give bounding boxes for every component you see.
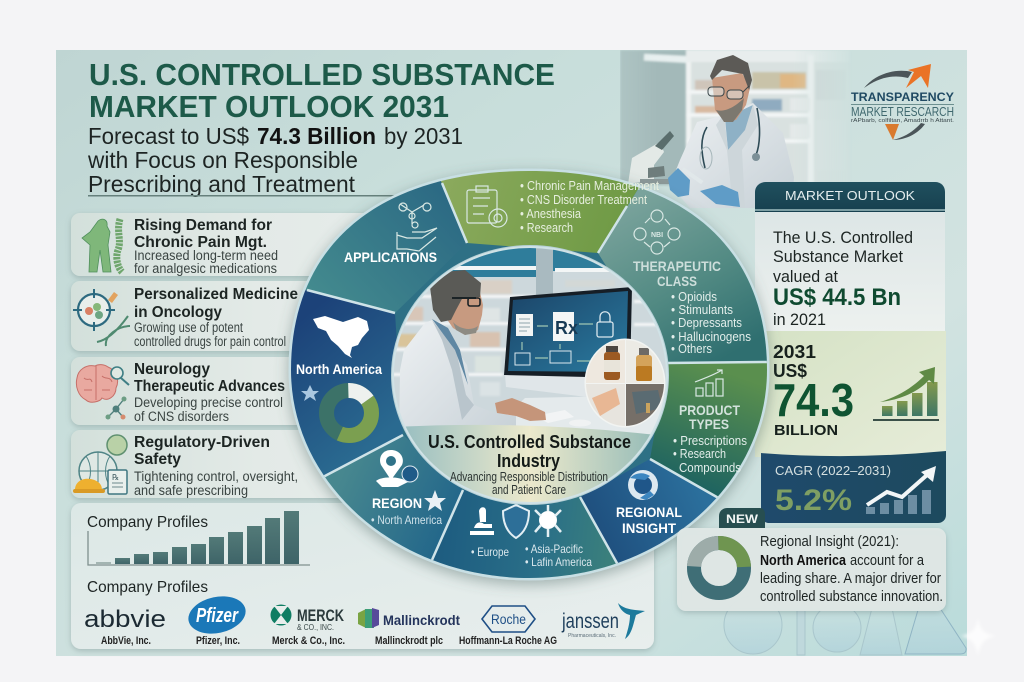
icon: bars with arrow bbox=[695, 370, 723, 396]
icon: hand with molecules bbox=[397, 203, 437, 251]
logo: Pfizer: Pfizer bbox=[196, 605, 239, 627]
card: oncology: controlled drugs for pain control bbox=[134, 334, 286, 349]
header: market outlook: MARKET OUTLOOK bbox=[785, 188, 915, 203]
card: regulatory: Safety bbox=[134, 451, 181, 468]
segment: regional insight: INSIGHT bbox=[622, 520, 676, 536]
icon: north america map bbox=[313, 316, 369, 358]
segment: north america bbox=[296, 316, 382, 436]
chart: donut bbox=[326, 390, 372, 436]
segment: region: REGION bbox=[372, 495, 422, 511]
icon: globe, helmet, prescription bbox=[73, 435, 127, 494]
center scene bbox=[391, 245, 669, 505]
body: market value: The U.S. Controlled bbox=[773, 228, 913, 247]
segment: product types: • Prescriptions bbox=[673, 433, 747, 448]
logo: Mallinckrodt: Mallinckrodt bbox=[383, 612, 460, 628]
forecast: 2031 value: 2031 bbox=[773, 342, 816, 362]
body: market value bbox=[755, 212, 945, 332]
title: MARKET OUTLOOK 2031 bbox=[89, 89, 449, 124]
doctor head bbox=[448, 293, 483, 335]
stat: CAGR: 5.2% bbox=[775, 484, 852, 517]
card: chronic pain: Increased long-term need bbox=[134, 248, 278, 263]
logo: Merck: MERCK bbox=[297, 606, 345, 625]
icon: target molecule and DNA bbox=[73, 289, 130, 346]
screen workflow icons: Rx bbox=[555, 318, 578, 338]
center label text: U.S. Controlled Substance bbox=[428, 432, 631, 452]
callout: regional insight: controlled substance innovation. bbox=[760, 589, 943, 605]
ring diagram bbox=[281, 166, 777, 592]
stat: CAGR bbox=[761, 451, 946, 523]
icon: globe, helmet, prescription: ℞ bbox=[112, 473, 119, 482]
segment: therapeutic class: THERAPEUTIC bbox=[633, 258, 721, 274]
logo: Roche: Hoffmann-La Roche AG bbox=[459, 635, 557, 647]
segment: applications list bbox=[467, 178, 659, 235]
card: neurology: of CNS disorders bbox=[134, 409, 229, 424]
header: market outlook bbox=[755, 182, 945, 212]
doctor coat bbox=[670, 103, 794, 208]
segment: product types bbox=[673, 370, 747, 475]
segment: product types: • Research bbox=[673, 446, 726, 461]
body: market value: valued at bbox=[773, 267, 838, 286]
segment: therapeutic class: • Others bbox=[671, 341, 712, 356]
callout: regional insight: account for a bbox=[850, 553, 925, 569]
card: oncology: Personalized Medicine bbox=[134, 286, 298, 303]
subtitle: Prescribing and Treatment bbox=[88, 171, 356, 197]
segment: product types: Compounds bbox=[679, 460, 741, 475]
logo: Transparency Market Research: TRANSPARENCY bbox=[851, 90, 954, 104]
segment: regions list: • Europe bbox=[471, 545, 509, 559]
icon: map pin bbox=[376, 450, 418, 487]
logo: Janssen: janssen bbox=[561, 610, 619, 633]
heading: company profiles chart: Company Profiles bbox=[87, 514, 208, 531]
card: regulatory bbox=[71, 430, 381, 498]
segment: region bbox=[371, 450, 446, 527]
segment: applications list: • CNS Disorder Treatment bbox=[520, 192, 647, 207]
logo: Merck: Merck & Co., Inc. bbox=[272, 635, 345, 647]
card: regulatory: and safe prescribing bbox=[134, 483, 248, 498]
card: neurology bbox=[71, 357, 381, 425]
bar chart bbox=[88, 511, 310, 565]
segment: therapeutic class: CLASS bbox=[657, 273, 697, 289]
card: oncology: in Oncology bbox=[134, 304, 222, 321]
card: oncology bbox=[71, 281, 381, 351]
sparkle bbox=[960, 618, 996, 656]
segment: therapeutic class: • Opioids bbox=[671, 289, 717, 304]
segment: applications: APPLICATIONS bbox=[344, 249, 437, 265]
segment: applications list: • Chronic Pain Management bbox=[520, 178, 659, 193]
subtitle: with Focus on Responsible bbox=[87, 147, 358, 173]
logo: Transparency Market Research bbox=[851, 64, 954, 140]
gloves bbox=[668, 167, 740, 207]
body: market value: Substance Market bbox=[773, 247, 903, 266]
body: market value: in 2021 bbox=[773, 310, 826, 329]
card: chronic pain: Rising Demand for bbox=[134, 217, 272, 234]
logo: AbbVie: AbbVie, Inc. bbox=[101, 635, 151, 647]
card: neurology: Neurology bbox=[134, 361, 210, 378]
card: neurology: Therapeutic Advances bbox=[134, 378, 285, 395]
logo: Pfizer bbox=[185, 591, 249, 647]
badge: new bbox=[719, 508, 765, 528]
segment: product types: TYPES bbox=[689, 416, 729, 432]
segment: region: • North America bbox=[371, 513, 442, 527]
logo: Merck: & CO., INC. bbox=[297, 623, 334, 632]
icon: microscope bbox=[470, 507, 494, 535]
background panel bbox=[56, 50, 967, 656]
segment: applications bbox=[344, 203, 437, 265]
logo: AbbVie bbox=[84, 606, 166, 647]
inset: product photos bbox=[583, 338, 668, 428]
center label text: Advancing Responsible Distribution bbox=[450, 469, 608, 484]
chart: CAGR arrow bbox=[866, 466, 936, 514]
callout: regional insight: North America bbox=[760, 553, 847, 569]
title: U.S. CONTROLLED SUBSTANCE bbox=[89, 57, 555, 92]
card: neurology: Developing precise control bbox=[134, 395, 283, 410]
chart: rising bars bbox=[873, 367, 939, 421]
stat: CAGR: CAGR (2022–2031) bbox=[775, 463, 891, 478]
microscope bbox=[628, 131, 674, 184]
forecast: 2031 value: 74.3 bbox=[773, 374, 854, 426]
chart: regional donut bbox=[694, 543, 744, 593]
forecast: 2031 value bbox=[755, 331, 946, 457]
icon: globe bbox=[628, 470, 658, 500]
card: regulatory: Tightening control, oversight, bbox=[134, 469, 298, 484]
icon: person with back pain and spine bbox=[82, 219, 122, 272]
callout: regional insight: leading share. A major driver for bbox=[760, 571, 941, 587]
segment: therapeutic class: • Depressants bbox=[671, 315, 742, 330]
icon: NBI cycle bbox=[634, 210, 680, 254]
subtitle bbox=[87, 123, 463, 197]
body: market value: US$ 44.5 Bn bbox=[773, 284, 901, 311]
forecast: 2031 value: US$ bbox=[773, 361, 807, 381]
title bbox=[89, 57, 555, 124]
center label text: and Patient Care bbox=[492, 482, 566, 497]
logo: AbbVie: abbvie bbox=[84, 606, 166, 633]
center label text: Industry bbox=[497, 451, 560, 471]
icon: brain and molecule bbox=[76, 365, 129, 420]
icon: shield bbox=[503, 505, 529, 538]
logo: Mallinckrodt bbox=[358, 608, 460, 647]
subtitle: 74.3 Billion bbox=[257, 123, 376, 149]
icon: clipboard with gear bbox=[467, 186, 507, 227]
center label text bbox=[428, 432, 631, 497]
card: oncology: Growing use of potent bbox=[134, 320, 243, 335]
logo: Roche: Roche bbox=[491, 611, 526, 627]
card: regulatory: Regulatory-Driven bbox=[134, 434, 270, 451]
doctor hand bbox=[495, 398, 546, 421]
subtitle: Forecast to US$ bbox=[88, 123, 249, 149]
logo: Transparency Market Research: rAPbarb, colfiltan, Amadrrb h Attant. bbox=[851, 118, 954, 124]
card: chronic pain: for analgesic medications bbox=[134, 261, 277, 276]
segment: regions list: • Lafin America bbox=[525, 555, 592, 569]
icon: star bbox=[424, 490, 446, 511]
forecast: 2031 value: BILLION bbox=[774, 422, 838, 439]
keyboard bbox=[544, 410, 574, 423]
card: chronic pain bbox=[71, 213, 381, 276]
subtitle: by 2031 bbox=[384, 123, 463, 149]
logo: Merck bbox=[270, 604, 345, 647]
monitor bbox=[505, 375, 586, 396]
segment: regional insight bbox=[616, 470, 682, 536]
segment: product types: PRODUCT bbox=[679, 402, 740, 418]
segment: north america: North America bbox=[296, 362, 382, 377]
logo: Mallinckrodt: Mallinckrodt plc bbox=[375, 635, 443, 647]
segment: applications list: • Anesthesia bbox=[520, 206, 582, 221]
segment: therapeutic class bbox=[633, 210, 751, 356]
doctor head bbox=[708, 55, 752, 122]
logo: Roche bbox=[459, 606, 557, 647]
card: chronic pain: Chronic Pain Mgt. bbox=[134, 234, 267, 251]
segment: therapeutic class: • Stimulants bbox=[671, 302, 733, 317]
desk bbox=[507, 395, 664, 434]
segment: regions list bbox=[470, 505, 592, 569]
icon: virus globe bbox=[535, 505, 561, 537]
pharmacy photo with doctor bbox=[620, 50, 850, 208]
segment: therapeutic class: • Hallucinogens bbox=[671, 329, 751, 344]
badge: new: NEW bbox=[726, 512, 759, 526]
segment: applications list: • Research bbox=[520, 220, 573, 235]
callout: regional insight: Regional Insight (2021): bbox=[760, 534, 899, 550]
panel: company profiles bbox=[71, 503, 654, 649]
heading: company profiles logos: Company Profiles bbox=[87, 579, 208, 596]
decorative flasks bbox=[724, 585, 966, 655]
logo: Janssen: Pharmaceuticals, Inc. bbox=[568, 633, 616, 639]
panel: market outlook bbox=[755, 182, 946, 523]
segment: regional insight: REGIONAL bbox=[616, 504, 682, 520]
logo: Transparency Market Research: MARKET RESCARCH bbox=[851, 105, 954, 119]
logo: Janssen bbox=[561, 603, 645, 639]
callout: regional insight bbox=[677, 508, 946, 611]
logo: Pfizer: Pfizer, Inc. bbox=[196, 635, 240, 647]
screen workflow icons bbox=[515, 312, 613, 365]
segment: regions list: • Asia-Pacific bbox=[525, 542, 583, 556]
icon: star bbox=[301, 385, 319, 401]
segment: therapeutic class: NBI bbox=[651, 232, 663, 239]
infographic canvas bbox=[56, 50, 967, 656]
doctor coat bbox=[400, 320, 516, 426]
